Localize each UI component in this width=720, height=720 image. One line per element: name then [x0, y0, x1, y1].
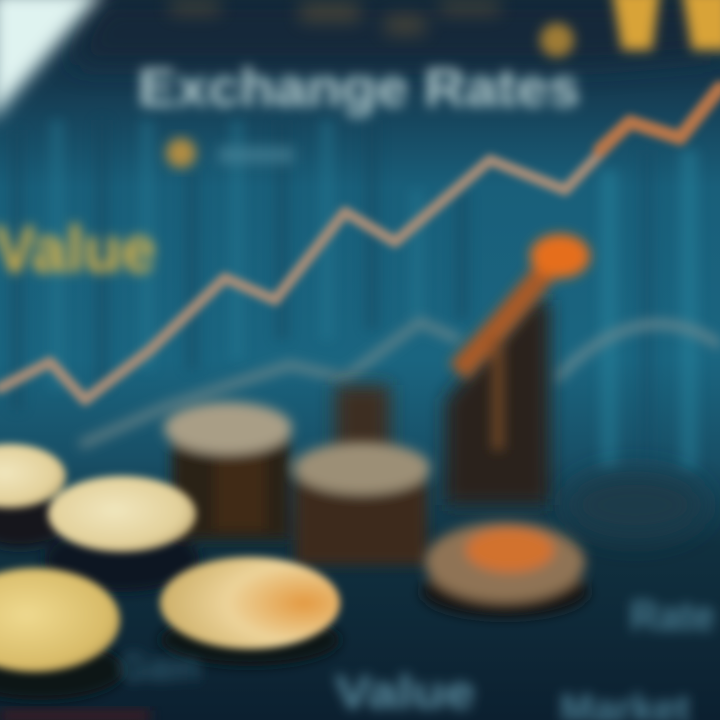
bottom faded labels: Gain — [120, 647, 200, 689]
icon: gold marks top right — [540, 0, 720, 57]
faded coin right — [565, 471, 705, 539]
orange coin — [421, 522, 589, 618]
bottom faded labels: Value — [335, 666, 475, 718]
orange trend arrow — [458, 234, 590, 450]
dark band at top — [70, 0, 720, 65]
bottom edge tint — [0, 710, 150, 720]
right arc line — [555, 324, 720, 380]
bright corner — [0, 0, 104, 122]
top faded gold marks — [170, 0, 500, 35]
chart stripes — [10, 120, 698, 470]
dark bars — [335, 300, 550, 505]
bottom faded labels: Rate — [630, 592, 715, 639]
coin stacks — [0, 402, 430, 700]
bottom faded labels — [120, 592, 715, 720]
main trend line — [0, 88, 720, 400]
gold coins — [0, 444, 340, 672]
secondary trend line — [80, 322, 460, 445]
bullet label — [166, 138, 294, 168]
heading: Exchange Rates — [138, 58, 580, 118]
